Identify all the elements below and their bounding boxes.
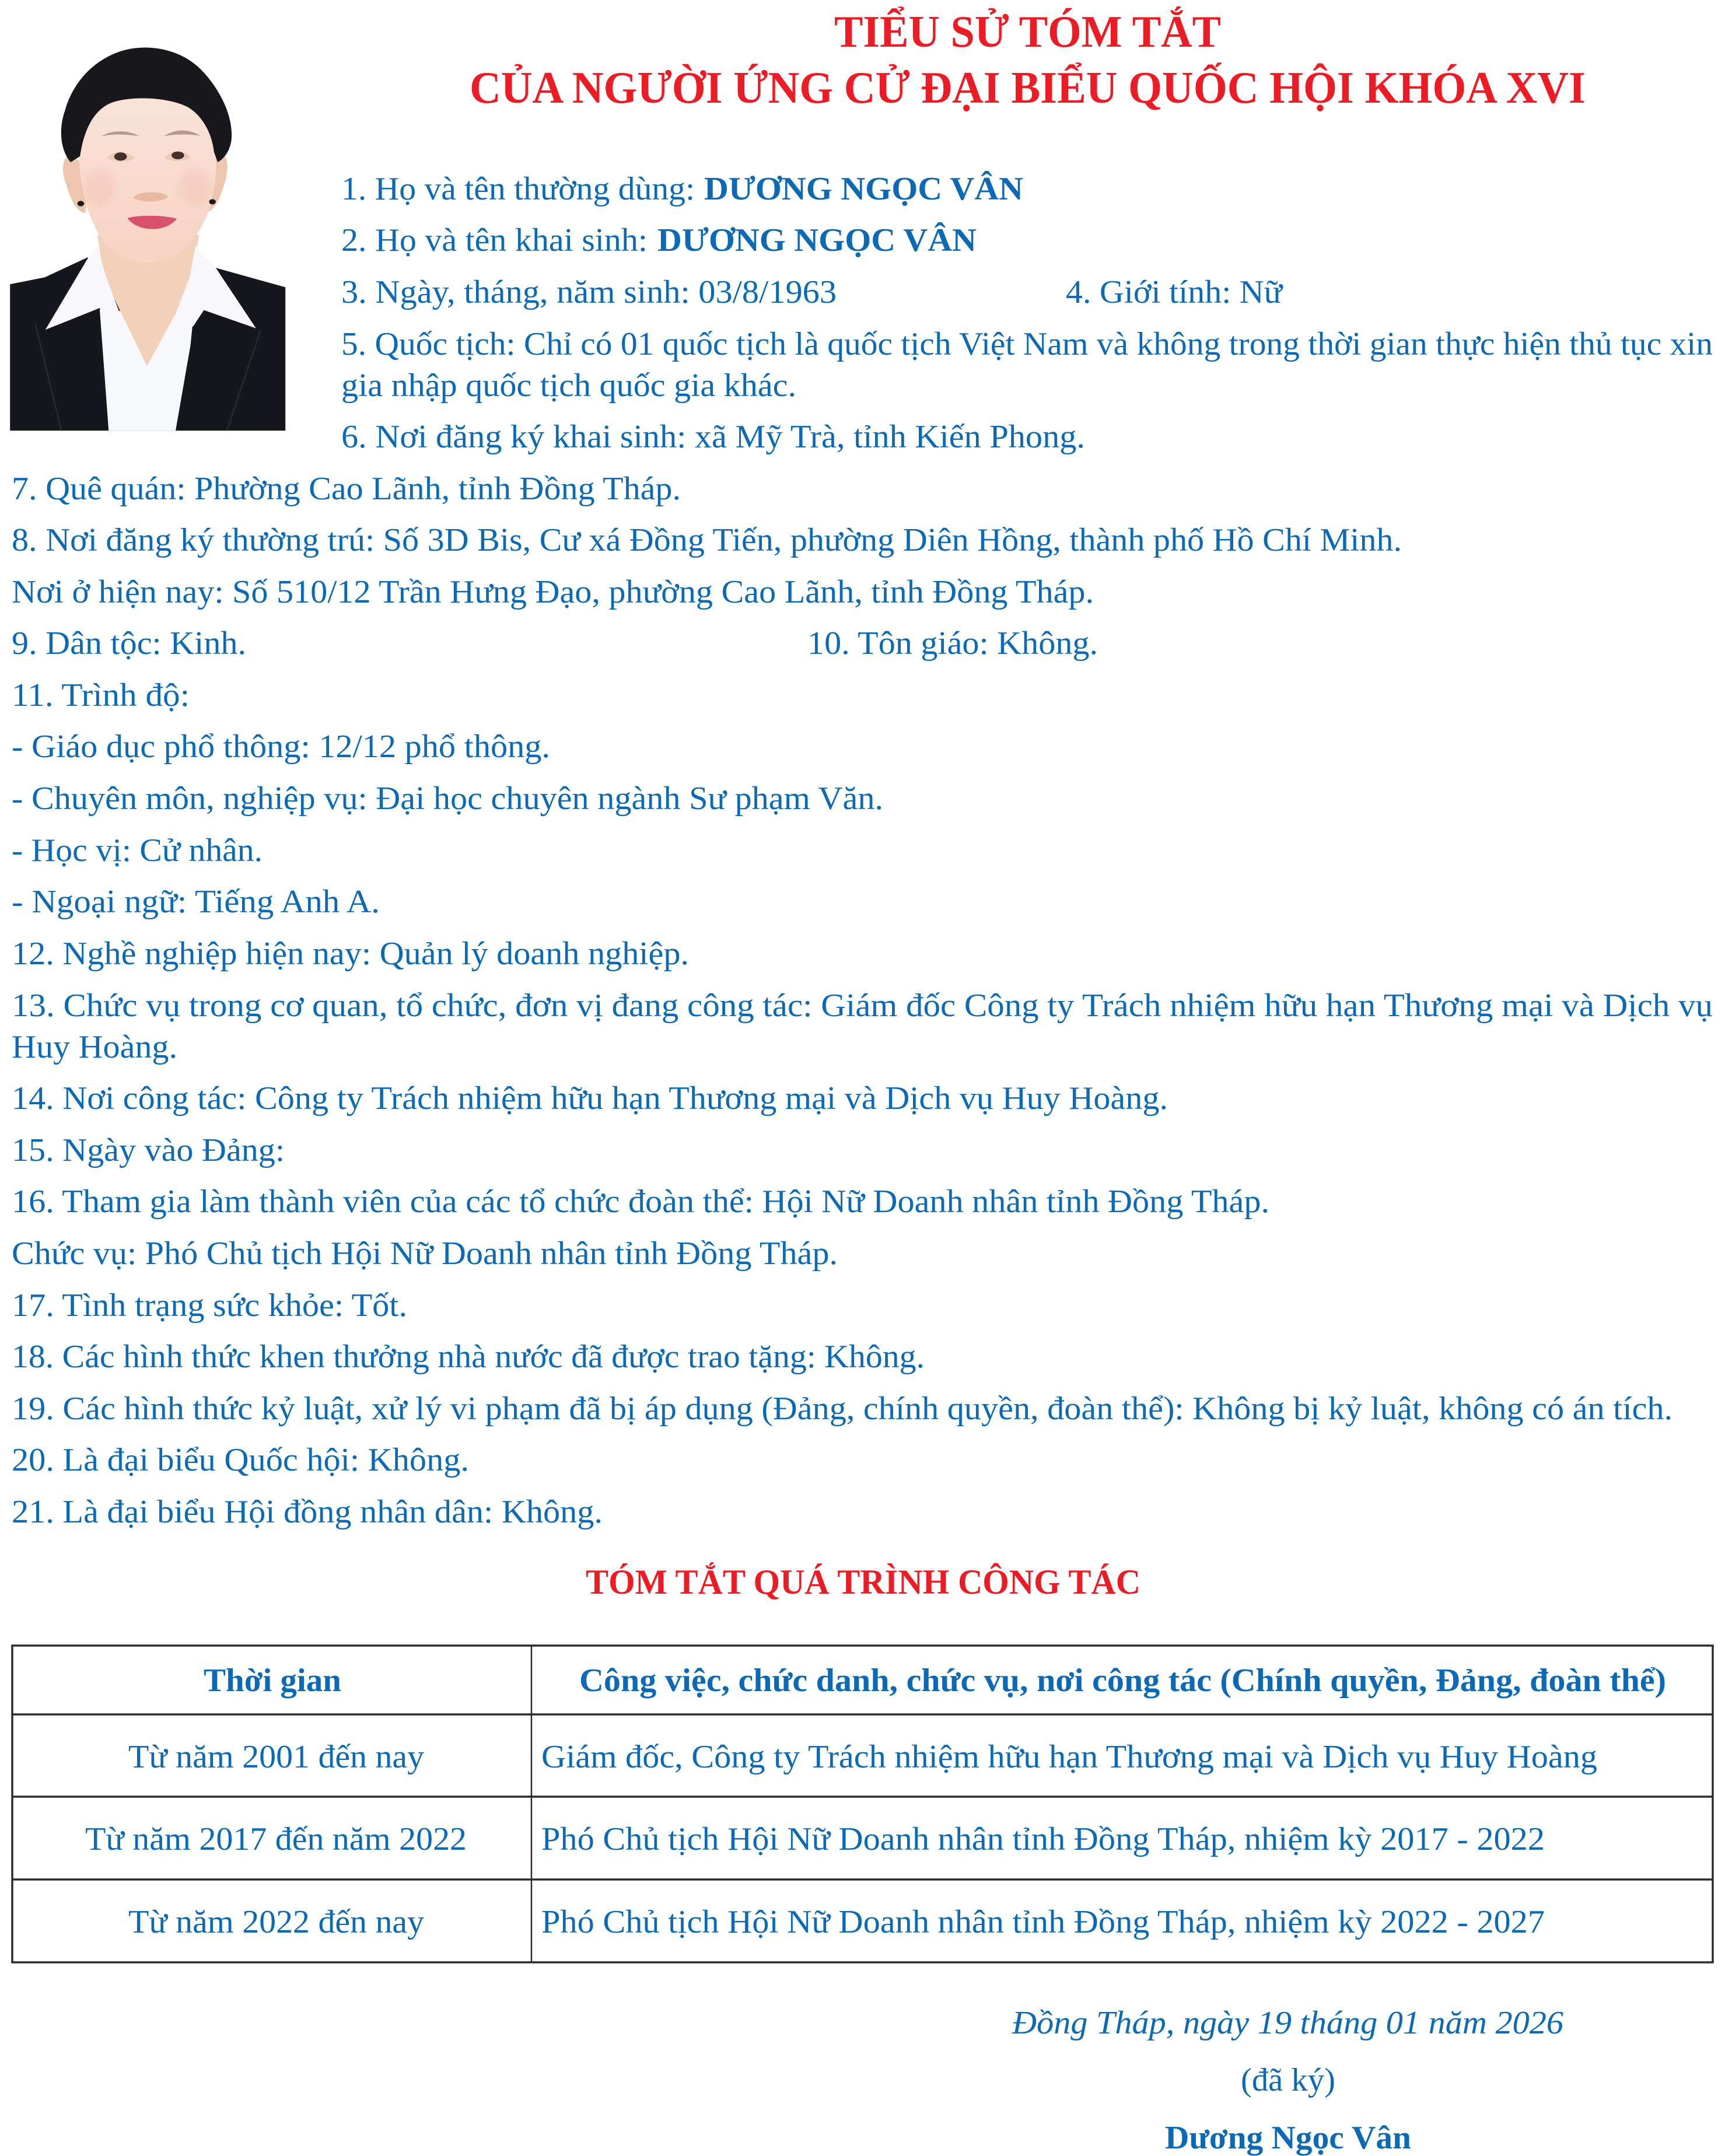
biography list: 6. Nơi đăng ký khai sinh: xã Mỹ Trà, tỉnh Kiến Phong.: [341, 419, 1085, 455]
collar left: [46, 246, 147, 366]
biography list: - Chuyên môn, nghiệp vụ: Đại học chuyên ngành Sư phạm Văn.: [12, 780, 883, 817]
biography list: Chức vụ: Phó Chủ tịch Hội Nữ Doanh nhân tỉnh Đồng Tháp.: [12, 1236, 838, 1272]
biography list: 5. Quốc tịch: Chỉ có 01 quốc tịch là quốc tịch Việt Nam và không trong thời gian thực hiện thủ tục xin: [341, 326, 1713, 362]
biography list: - Ngoại ngữ: Tiếng Anh A.: [12, 884, 380, 920]
signature block: Đồng Tháp, ngày 19 tháng 01 năm 2026: [1012, 2005, 1563, 2041]
biography list: 13. Chức vụ trong cơ quan, tổ chức, đơn vị đang công tác: Giám đốc Công ty Trách nhiệm hữu hạn Thương mại và Dịch vụ: [12, 988, 1713, 1024]
work history table: Giám đốc, Công ty Trách nhiệm hữu hạn Thương mại và Dịch vụ Huy Hoàng: [541, 1739, 1597, 1775]
cheeks: [83, 168, 117, 207]
work history table: Phó Chủ tịch Hội Nữ Doanh nhân tỉnh Đồng Tháp, nhiệm kỳ 2022 - 2027: [541, 1904, 1545, 1940]
biography list: - Học vị: Cử nhân.: [12, 832, 263, 869]
biography list: 14. Nơi công tác: Công ty Trách nhiệm hữu hạn Thương mại và Dịch vụ Huy Hoàng.: [12, 1080, 1168, 1116]
biography list: 17. Tình trạng sức khỏe: Tốt.: [12, 1287, 407, 1324]
ear left: [63, 155, 88, 213]
section heading: TÓM TẮT QUÁ TRÌNH CÔNG TÁC: [586, 1563, 1140, 1601]
signature block: Dương Ngọc Vân: [1165, 2120, 1411, 2156]
signature block: [1012, 2005, 1563, 2156]
work history table: Phó Chủ tịch Hội Nữ Doanh nhân tỉnh Đồng Tháp, nhiệm kỳ 2017 - 2022: [541, 1821, 1545, 1857]
biography list: 1. Họ và tên thường dùng:: [341, 171, 695, 207]
biography list: [12, 170, 1713, 1530]
biography list: Nơi ở hiện nay: Số 510/12 Trần Hưng Đạo, phường Cao Lãnh, tỉnh Đồng Tháp.: [12, 574, 1094, 610]
biography list: 4. Giới tính: Nữ: [1066, 274, 1283, 310]
biography list: 3. Ngày, tháng, năm sinh: 03/8/1963: [341, 274, 837, 310]
eyebrows: [101, 131, 139, 136]
biography list: 20. Là đại biểu Quốc hội: Không.: [12, 1442, 469, 1478]
collar right: [147, 246, 256, 366]
nose: [133, 192, 168, 202]
work history table: [12, 1646, 1713, 1962]
biography list: 15. Ngày vào Đảng:: [12, 1132, 285, 1168]
biography list: 2. Họ và tên khai sinh:: [341, 222, 648, 258]
biography list: 19. Các hình thức kỷ luật, xử lý vi phạm đã bị áp dụng (Đảng, chính quyền, đoàn thể): Không bị kỷ luật, không có án tích.: [12, 1391, 1672, 1427]
biography list: 12. Nghề nghiệp hiện nay: Quản lý doanh nghiệp.: [12, 936, 689, 972]
biography list: 8. Nơi đăng ký thường trú: Số 3D Bis, Cư xá Đồng Tiến, phường Diên Hồng, thành phố Hồ Chí Minh.: [12, 522, 1402, 558]
biography list: 16. Tham gia làm thành viên của các tổ chức đoàn thể: Hội Nữ Doanh nhân tỉnh Đồng Tháp.: [12, 1184, 1269, 1220]
biography list: DƯƠNG NGỌC VÂN: [704, 170, 1023, 207]
biography list: - Giáo dục phổ thông: 12/12 phổ thông.: [12, 729, 550, 765]
work history table: Thời gian: [204, 1662, 341, 1699]
biography list: 21. Là đại biểu Hội đồng nhân dân: Không.: [12, 1494, 603, 1530]
jacket: [10, 257, 285, 430]
biography list: 7. Quê quán: Phường Cao Lãnh, tỉnh Đồng Tháp.: [12, 471, 681, 507]
work history table: Công việc, chức danh, chức vụ, nơi công tác (Chính quyền, Đảng, đoàn thể): [579, 1662, 1666, 1699]
title: TIỂU SỬ TÓM TẮT: [834, 6, 1221, 57]
face: [79, 97, 216, 262]
earrings: [78, 201, 84, 206]
hair: [61, 48, 232, 162]
title: CỦA NGƯỜI ỨNG CỬ ĐẠI BIỂU QUỐC HỘI KHÓA XVI: [470, 62, 1586, 113]
work history table: Từ năm 2022 đến nay: [128, 1904, 424, 1940]
biography list: 18. Các hình thức khen thưởng nhà nước đã được trao tặng: Không.: [12, 1339, 925, 1375]
neck: [97, 235, 199, 366]
signature block: (đã ký): [1241, 2062, 1335, 2098]
biography list: 9. Dân tộc: Kinh.: [12, 625, 246, 662]
table grid: [12, 1646, 1713, 1962]
eyes: [107, 152, 135, 162]
biography list: gia nhập quốc tịch quốc gia khác.: [341, 368, 796, 404]
biography list: Huy Hoàng.: [12, 1029, 177, 1065]
biography list: 10. Tôn giáo: Không.: [807, 625, 1098, 662]
lapels: [36, 324, 260, 430]
title: [470, 6, 1586, 113]
biography list: 11. Trình độ:: [12, 677, 190, 713]
portrait photo: [10, 48, 285, 430]
shirt: [100, 310, 194, 430]
lips: [127, 216, 177, 229]
work history table: Từ năm 2017 đến năm 2022: [85, 1821, 467, 1857]
ear right: [207, 155, 228, 212]
work history table: Từ năm 2001 đến nay: [128, 1739, 424, 1775]
biography list: DƯƠNG NGỌC VÂN: [657, 222, 977, 258]
